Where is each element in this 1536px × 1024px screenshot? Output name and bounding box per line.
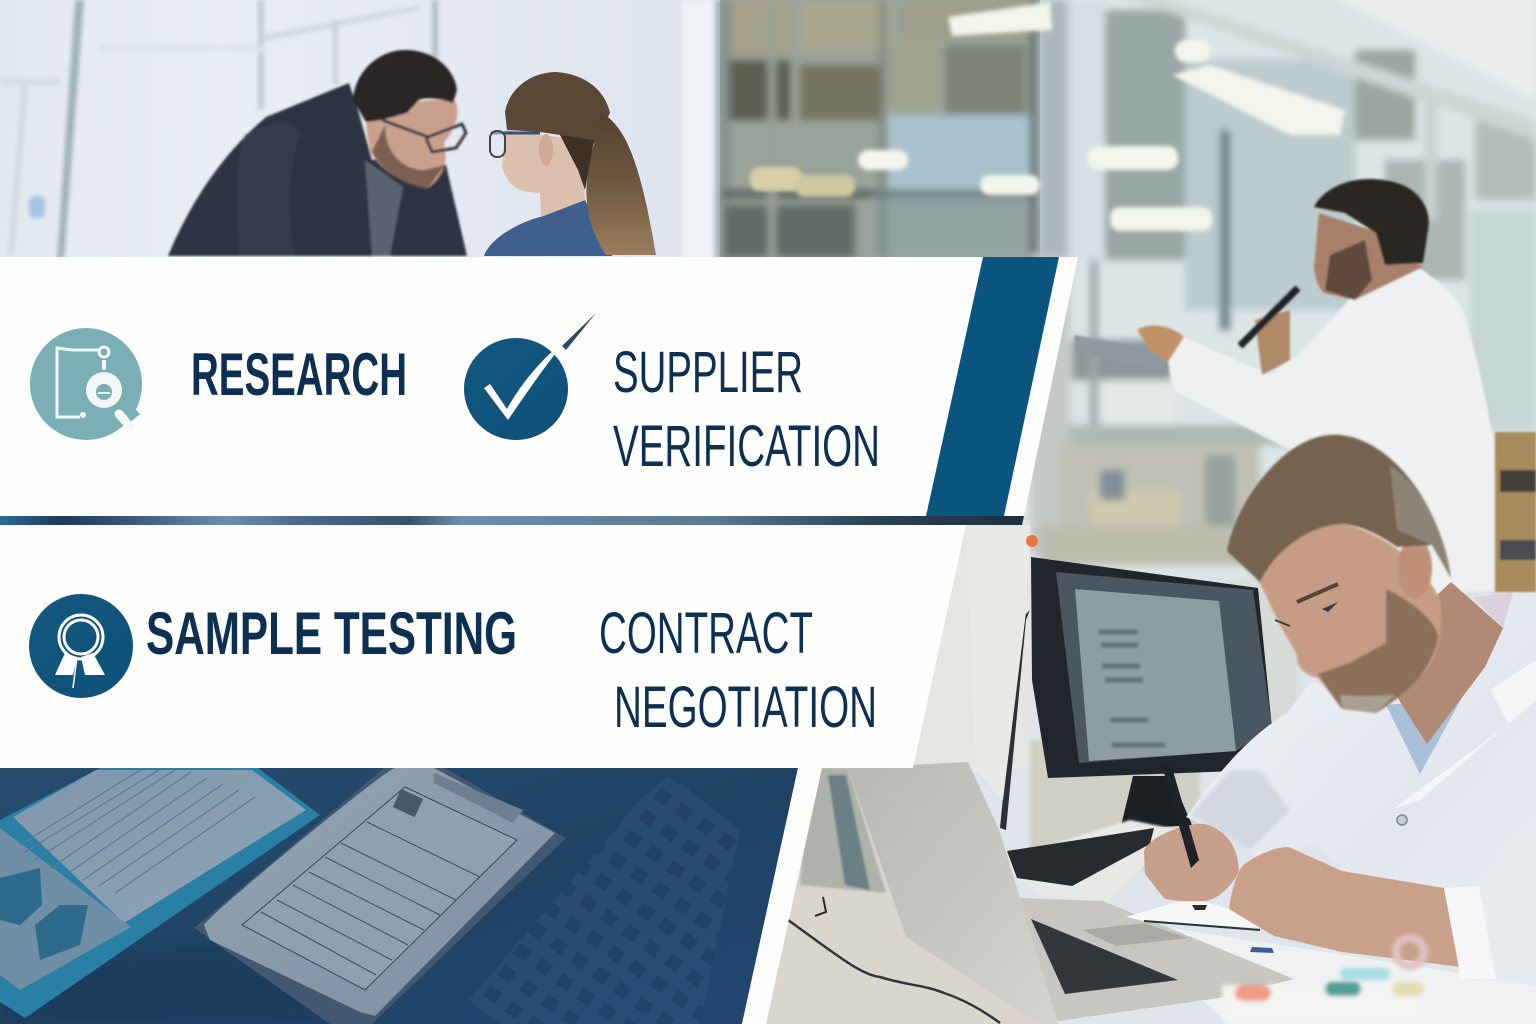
accent: white slanted divider <box>742 768 822 1024</box>
heading: supplier verification: SUPPLIER <box>613 340 803 405</box>
figure: woman with ponytail <box>484 72 656 256</box>
photo: blurred warehouse and lab <box>720 0 1536 600</box>
paper on desk <box>1130 928 1536 1024</box>
figure: man in dark jacket <box>168 50 467 256</box>
photo: office meeting <box>0 0 730 260</box>
icon: research magnifier <box>30 328 142 440</box>
panel: second band <box>0 525 966 768</box>
heading: contract negotiation: NEGOTIATION <box>614 675 877 740</box>
heading: contract negotiation <box>599 601 877 740</box>
icon: spreadsheet clipboard right <box>469 775 740 1024</box>
icon: sample jars <box>1222 938 1424 1024</box>
icon: clipboard left <box>0 768 320 1018</box>
heading: sample testing: SAMPLE TESTING <box>146 600 517 667</box>
figure: man in white coat at shelf <box>1074 179 1510 600</box>
panel: top band <box>0 257 1078 516</box>
icon: monitor <box>966 525 1272 830</box>
icon: clipboard centre <box>194 768 566 1024</box>
panel: clipboards dark background <box>0 768 798 1024</box>
photo: desk with monitor and laptop <box>766 432 1536 1024</box>
heading: contract negotiation: CONTRACT <box>599 601 813 666</box>
figure: man writing at desk <box>1126 435 1536 986</box>
icon: award ribbon <box>29 594 133 698</box>
divider: photo strip <box>0 516 1024 525</box>
heading: supplier verification: VERIFICATION <box>613 414 880 479</box>
heading: supplier verification <box>613 340 880 479</box>
icon: laptop <box>848 762 1294 1024</box>
wood shelves <box>1495 432 1536 592</box>
accent: blue slanted stripe <box>926 257 1059 516</box>
light fixtures <box>750 2 1345 231</box>
icon: keyboard <box>1007 828 1154 886</box>
heading: research: RESEARCH <box>191 341 407 408</box>
desk surface <box>766 768 1180 1024</box>
icon: check mark badge <box>464 313 596 440</box>
